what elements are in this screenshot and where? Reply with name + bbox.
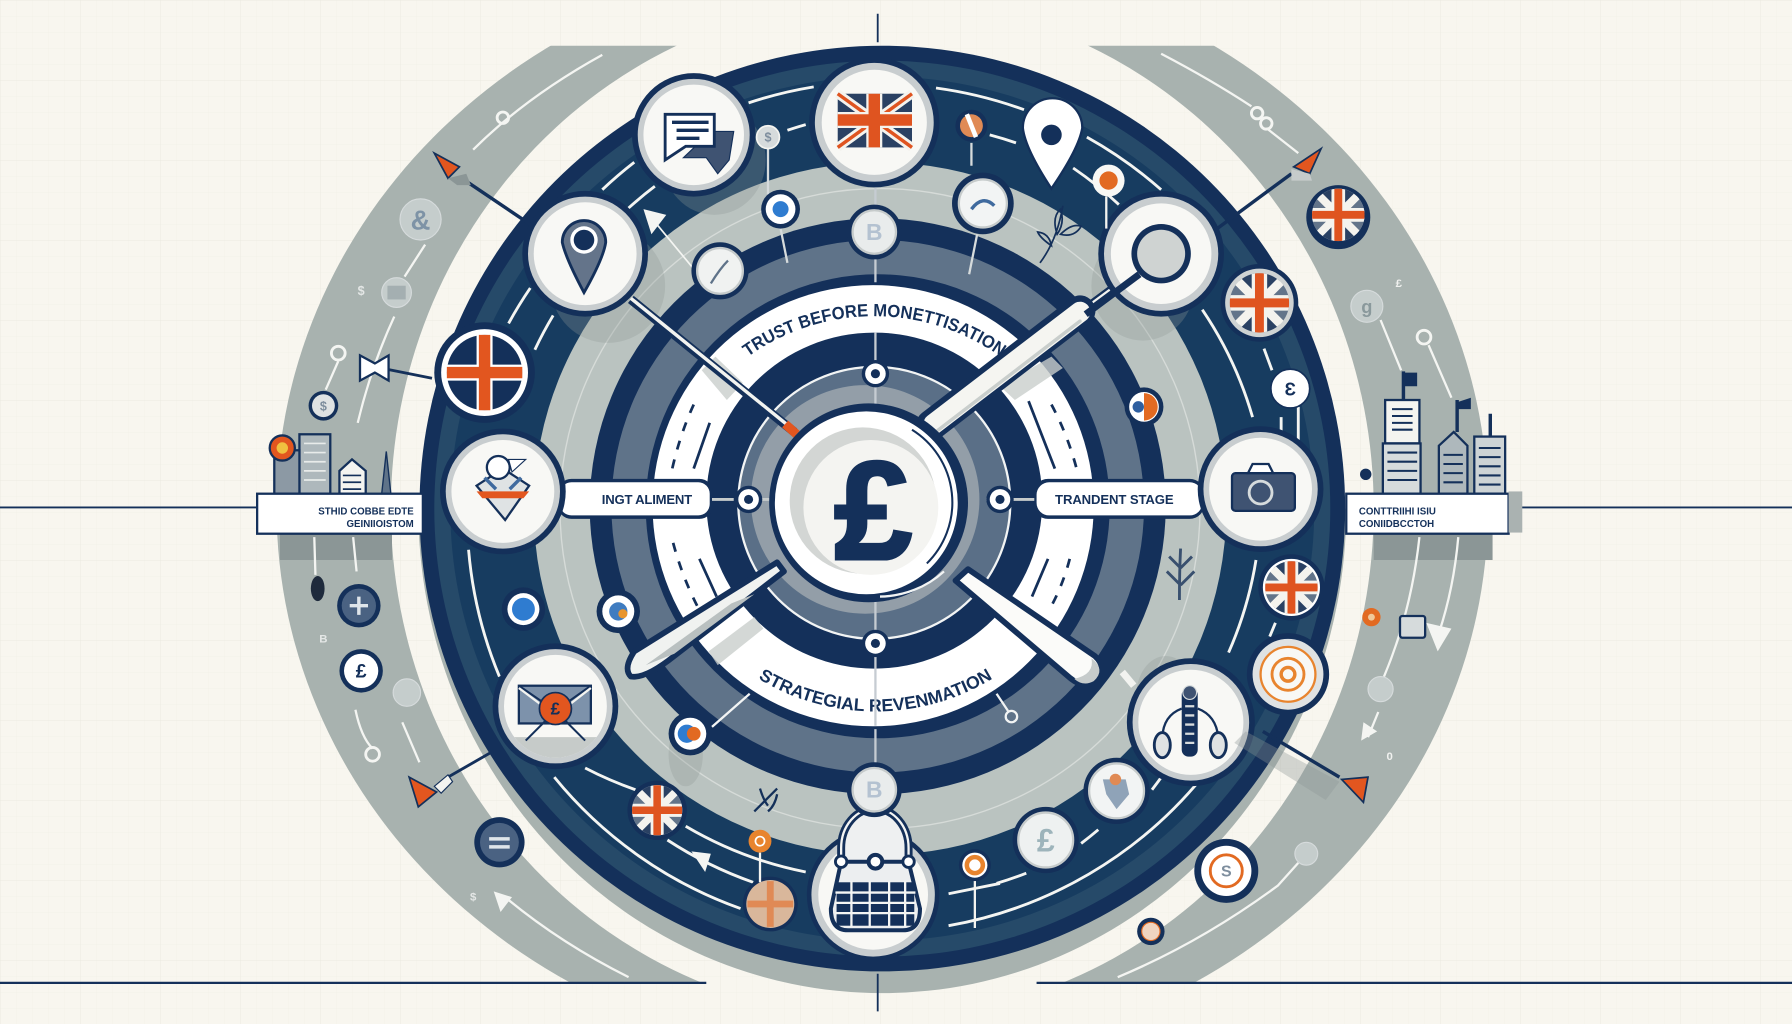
icon: cross flag medallion	[434, 322, 535, 423]
small coin badges on dial	[502, 110, 1329, 928]
arrow: upper left pointer	[434, 153, 471, 185]
heading arc: trust before monetisation: TRUST BEFORE MONETTISATION	[741, 304, 1007, 355]
vertical connector lines	[874, 183, 876, 763]
spoke: lower right handle	[955, 569, 1102, 685]
icon: envelope medallion: £	[551, 698, 561, 718]
medallion shadows on light grey ring	[551, 105, 1195, 786]
small badges on outer band: &	[411, 205, 430, 236]
outer band thin track lines	[314, 54, 1458, 977]
icon: balance tower medallion	[1127, 658, 1255, 786]
pill: transient stage	[1033, 479, 1205, 519]
icon: envelope medallion	[493, 643, 618, 769]
lower grey crescent around dial	[419, 508, 1346, 994]
track rings and arrowheads on outer band	[331, 107, 1451, 912]
centre pound coin	[769, 403, 968, 602]
grey shading beside spokes in white ring	[702, 357, 1063, 665]
small badges on outer band: g	[1361, 296, 1372, 317]
icon: lock bag medallion	[807, 808, 939, 961]
thin arc on light grey ring	[560, 189, 1200, 829]
skyline: left	[270, 434, 391, 494]
outer grey ring band	[277, 0, 1488, 1024]
icon: camera medallion	[1198, 426, 1323, 552]
small badges on outer band: £	[1396, 278, 1403, 290]
small badges on outer band: S	[1221, 864, 1232, 881]
small badges on outer band	[309, 199, 1425, 945]
spoke: upper right handle	[931, 265, 1143, 431]
icon: chat bubble medallion	[632, 73, 755, 197]
arrow: lower right pointer	[1234, 731, 1368, 802]
small badges on outer band: B	[319, 633, 328, 645]
callout: right stage label: CONIIDBCCTOH	[1359, 519, 1434, 530]
small coin badges on dial: B	[866, 777, 883, 803]
heading arc: strategial revenmation: STRATEGIAL REVENMATION	[760, 668, 992, 712]
callout: left stage label	[257, 494, 423, 534]
pill: intent alignment	[558, 479, 713, 519]
callout: right stage label: CONTTRIIHI ISIU	[1359, 506, 1436, 517]
icon: large UK flag medallion	[809, 57, 939, 187]
dashed lane markings in white ring	[672, 401, 1077, 608]
pill: transient stage: TRANDENT STAGE	[1055, 492, 1174, 507]
spoke extensions to outer arrows	[386, 174, 1339, 777]
small badges on outer band: £	[356, 661, 367, 683]
icon: bird shield medallion	[440, 429, 566, 554]
spoke: upper left pointer	[631, 298, 797, 434]
pill: intent alignment: INGT ALIMENT	[602, 492, 692, 507]
small coin badges on dial: B	[866, 219, 883, 245]
icon: white map pin	[1023, 98, 1082, 189]
small coin badges on dial: $	[764, 131, 771, 145]
icon: location pin medallion	[522, 191, 648, 317]
small badges on outer band: $	[320, 399, 327, 413]
spoke: lower left handle	[628, 562, 784, 677]
shaded blocks under stage labels	[280, 531, 1493, 560]
small flag badges	[627, 185, 1370, 931]
callout: right stage label	[1346, 491, 1522, 534]
icon: magnifier medallion	[1086, 191, 1224, 317]
small badges on outer band: $	[470, 892, 477, 904]
small coin badges on dial: Ɛ	[1285, 378, 1297, 399]
small badges on outer band: $	[358, 284, 365, 298]
connector hooks from ring to badges	[712, 694, 1017, 727]
axis node markers	[712, 360, 1034, 657]
skyline: right	[1360, 371, 1505, 494]
concentric dial rings	[419, 46, 1345, 971]
centre pound coin: £	[834, 433, 912, 589]
icon: left bow marker	[360, 355, 389, 381]
small coin badges on dial: £	[1037, 822, 1055, 858]
icon: leaf sprigs	[754, 206, 1194, 811]
callout: left stage label: STHID COBBE EDTE	[318, 506, 414, 517]
white track arcs	[469, 87, 1298, 926]
small badges on outer band: 0	[1387, 751, 1393, 763]
arrow: lower left pointer	[409, 775, 453, 807]
callout: left stage label: GEINIIOISTOM	[346, 519, 414, 530]
arrow: upper right pointer	[1291, 149, 1321, 181]
